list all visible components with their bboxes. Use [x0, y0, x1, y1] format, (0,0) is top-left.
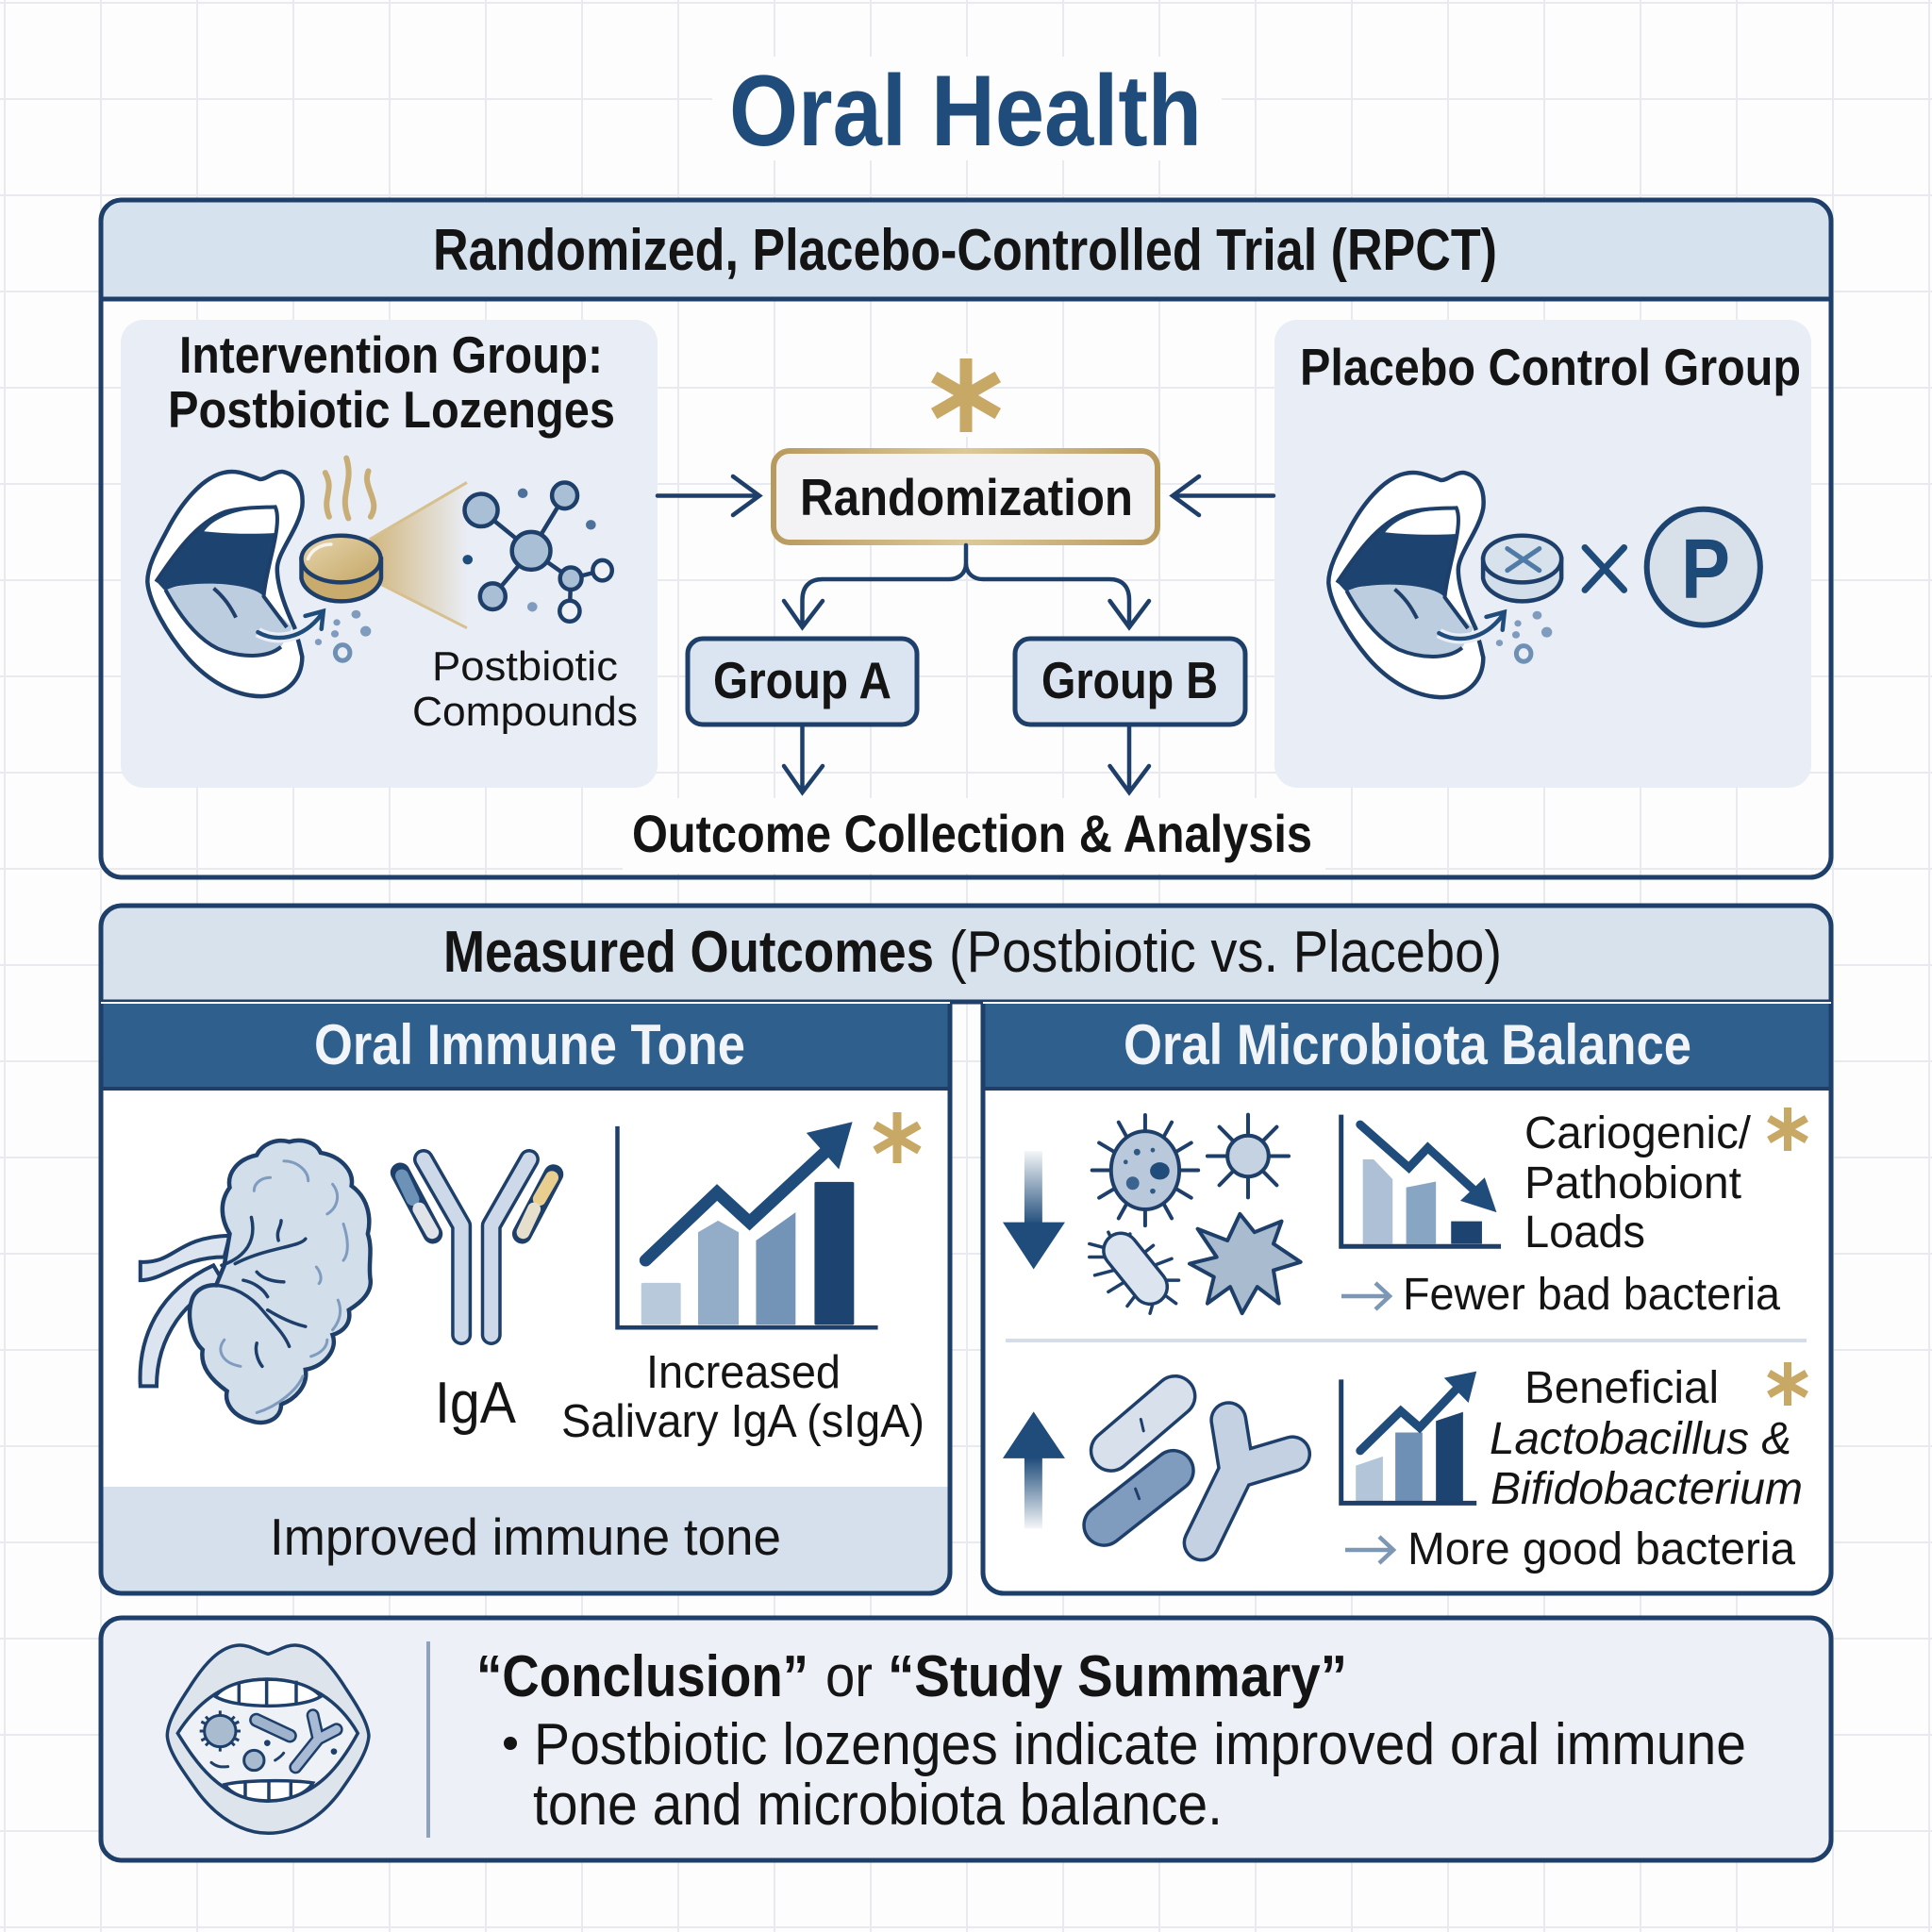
- label: beneficial bacteria: Beneficial: [1524, 1363, 1719, 1413]
- arrow: up: [1003, 1411, 1065, 1528]
- icon: harmful germs: [1090, 1115, 1301, 1313]
- label: cariogenic pathobiont loads: [1524, 1108, 1752, 1257]
- subheader: oral immune tone: [101, 1004, 950, 1089]
- chart: rising salivary IgA: [617, 1122, 878, 1327]
- panel: placebo control group: [1274, 320, 1811, 788]
- panel: oral immune tone: [101, 1002, 950, 1593]
- heading: intervention group: Postbiotic Lozenges: [168, 380, 615, 439]
- icon: gold asterisk: [931, 354, 1001, 437]
- conclusion heading: “Conclusion”: [476, 1644, 808, 1709]
- icon: tonsil gland: [141, 1141, 371, 1423]
- icon: placebo pill, cross and P badge: [1483, 509, 1760, 625]
- conclusion heading: “Study Summary”: [888, 1644, 1347, 1709]
- icon: gold star marker: [873, 1112, 922, 1163]
- panel: oral microbiota balance: [983, 1002, 1831, 1593]
- conclusion text: Postbiotic lozenges indicate improved oral immune: [534, 1712, 1746, 1777]
- title: Oral Health: [729, 54, 1202, 167]
- icon: IgA antibody: [400, 1159, 554, 1335]
- icon: open mouth with placebo: [1328, 473, 1552, 697]
- icon: beneficial bacteria: [1104, 1396, 1292, 1542]
- header: measured outcomes: Measured Outcomes: [443, 920, 934, 985]
- chart: falling pathobiont loads: [1341, 1115, 1501, 1246]
- label: increased salivary IgA: [561, 1347, 924, 1447]
- arrow: group A to outcome: [784, 724, 823, 792]
- label: cariogenic pathobiont loads: Cariogenic/: [1524, 1108, 1752, 1158]
- conclusion text: tone and microbiota balance.: [533, 1773, 1223, 1838]
- band: improved immune tone: Improved immune tone: [270, 1507, 781, 1566]
- group B box: [1015, 639, 1245, 724]
- panel header: RPCT: [101, 200, 1831, 299]
- arrow: down: [1003, 1151, 1065, 1270]
- label: P badge letter: P: [1681, 523, 1730, 617]
- heading: intervention group: [168, 325, 615, 439]
- icon: mouth with oral microbes: [167, 1645, 369, 1833]
- label: cariogenic pathobiont loads: Loads: [1524, 1208, 1645, 1257]
- label: cariogenic pathobiont loads: Pathobiont: [1524, 1158, 1741, 1208]
- randomization box: Randomization: [800, 468, 1133, 526]
- heading: placebo control group: Placebo Control Group: [1300, 338, 1801, 396]
- band: improved immune tone: [101, 1487, 950, 1593]
- panel: measured outcomes: [101, 906, 1831, 1593]
- label: beneficial bacteria: Bifidobacterium: [1491, 1464, 1803, 1514]
- label: postbiotic compounds: Postbiotic: [432, 643, 618, 690]
- label: fewer bad bacteria: Fewer bad bacteria: [1403, 1270, 1780, 1320]
- label: beneficial bacteria: Lactobacillus &: [1490, 1414, 1791, 1464]
- icon: gold star marker: [1767, 1108, 1808, 1151]
- group B box: Group B: [1041, 651, 1218, 709]
- outcome collection and analysis text: Outcome Collection & Analysis: [632, 804, 1312, 863]
- subheader: oral microbiota balance: [983, 1004, 1831, 1089]
- panel: intervention group: [121, 320, 658, 788]
- group A box: [688, 639, 917, 724]
- label: postbiotic compounds: Compounds: [412, 689, 638, 735]
- conclusion heading: or: [825, 1644, 873, 1709]
- chart: rising beneficial bacteria: [1341, 1372, 1476, 1503]
- arrow: group B to outcome: [1109, 724, 1149, 792]
- panel: randomized placebo-controlled trial: [101, 200, 1831, 877]
- conclusion text: [504, 1712, 1746, 1838]
- icon: open mouth with lozenge and molecule: [147, 458, 612, 696]
- heading: intervention group: Intervention Group:: [179, 325, 603, 384]
- icon: gold star marker: [1767, 1362, 1808, 1406]
- label: more good bacteria: More good bacteria: [1407, 1524, 1795, 1574]
- header: measured outcomes: (Postbiotic vs. Placebo): [949, 920, 1502, 985]
- label: IgA: IgA: [435, 1371, 517, 1436]
- arrow: placebo to randomization: [1173, 476, 1274, 515]
- subheader: oral immune tone: Oral Immune Tone: [314, 1013, 745, 1076]
- label: postbiotic compounds: [412, 643, 638, 735]
- label: increased salivary IgA: Salivary IgA (sIgA): [561, 1396, 924, 1447]
- arrow: split to group A and group B: [784, 545, 1149, 627]
- label: beneficial bacteria: [1490, 1363, 1803, 1514]
- panel header: RPCT: Randomized, Placebo-Controlled Trial (RPCT): [433, 218, 1497, 283]
- randomization box: [774, 451, 1158, 542]
- label: increased salivary IgA: Increased: [646, 1347, 841, 1398]
- group A box: Group A: [713, 651, 891, 709]
- conclusion heading: [476, 1644, 1347, 1709]
- panel: conclusion: [101, 1618, 1831, 1860]
- subheader: oral microbiota balance: Oral Microbiota Balance: [1124, 1013, 1691, 1076]
- header: measured outcomes: [101, 906, 1831, 1002]
- arrow: intervention to randomization: [658, 476, 759, 515]
